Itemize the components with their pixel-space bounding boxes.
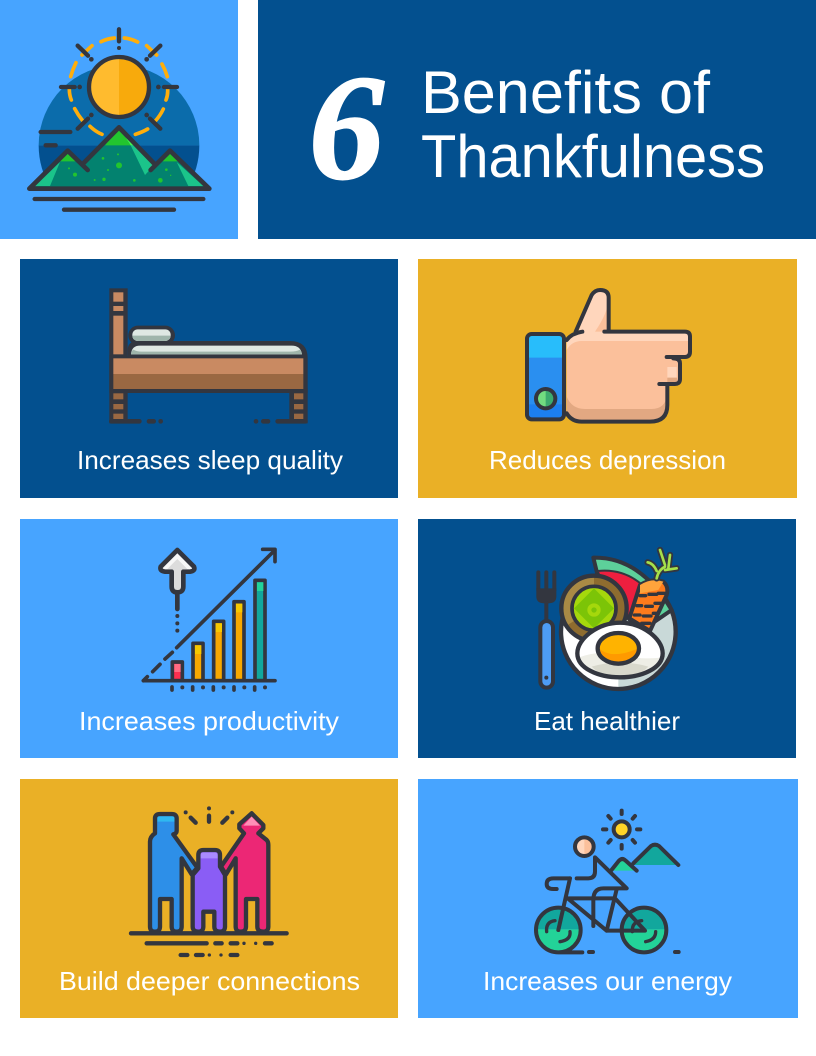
panel: build deeper connections — [20, 779, 398, 1018]
label: Increases productivity — [79, 706, 339, 736]
panel: increases sleep quality — [20, 259, 398, 498]
panel: increases our energy — [418, 779, 798, 1018]
icon: sun over mountains — [29, 29, 209, 210]
heading — [421, 59, 765, 190]
big number 6: 6 — [309, 45, 384, 211]
icon: growth chart — [143, 549, 275, 690]
panel: reduces depression — [418, 259, 797, 498]
label: Eat healthier — [534, 706, 680, 736]
label: Increases sleep quality — [77, 445, 343, 475]
icon: bed — [109, 288, 308, 424]
icon: food bowl and fork — [536, 550, 677, 689]
label: Build deeper connections — [59, 966, 360, 996]
heading: Thankfulness — [421, 123, 765, 190]
panel: hero icon — [0, 0, 238, 239]
icon: family — [131, 806, 287, 957]
icon: cyclist — [536, 811, 679, 952]
label: Increases our energy — [483, 966, 732, 996]
icon: thumbs up — [527, 290, 690, 422]
panel: title — [258, 0, 816, 239]
panel: eat healthier — [418, 519, 796, 758]
heading: Benefits of — [421, 59, 710, 126]
label: Reduces depression — [489, 445, 726, 475]
panel: increases productivity — [20, 519, 398, 758]
